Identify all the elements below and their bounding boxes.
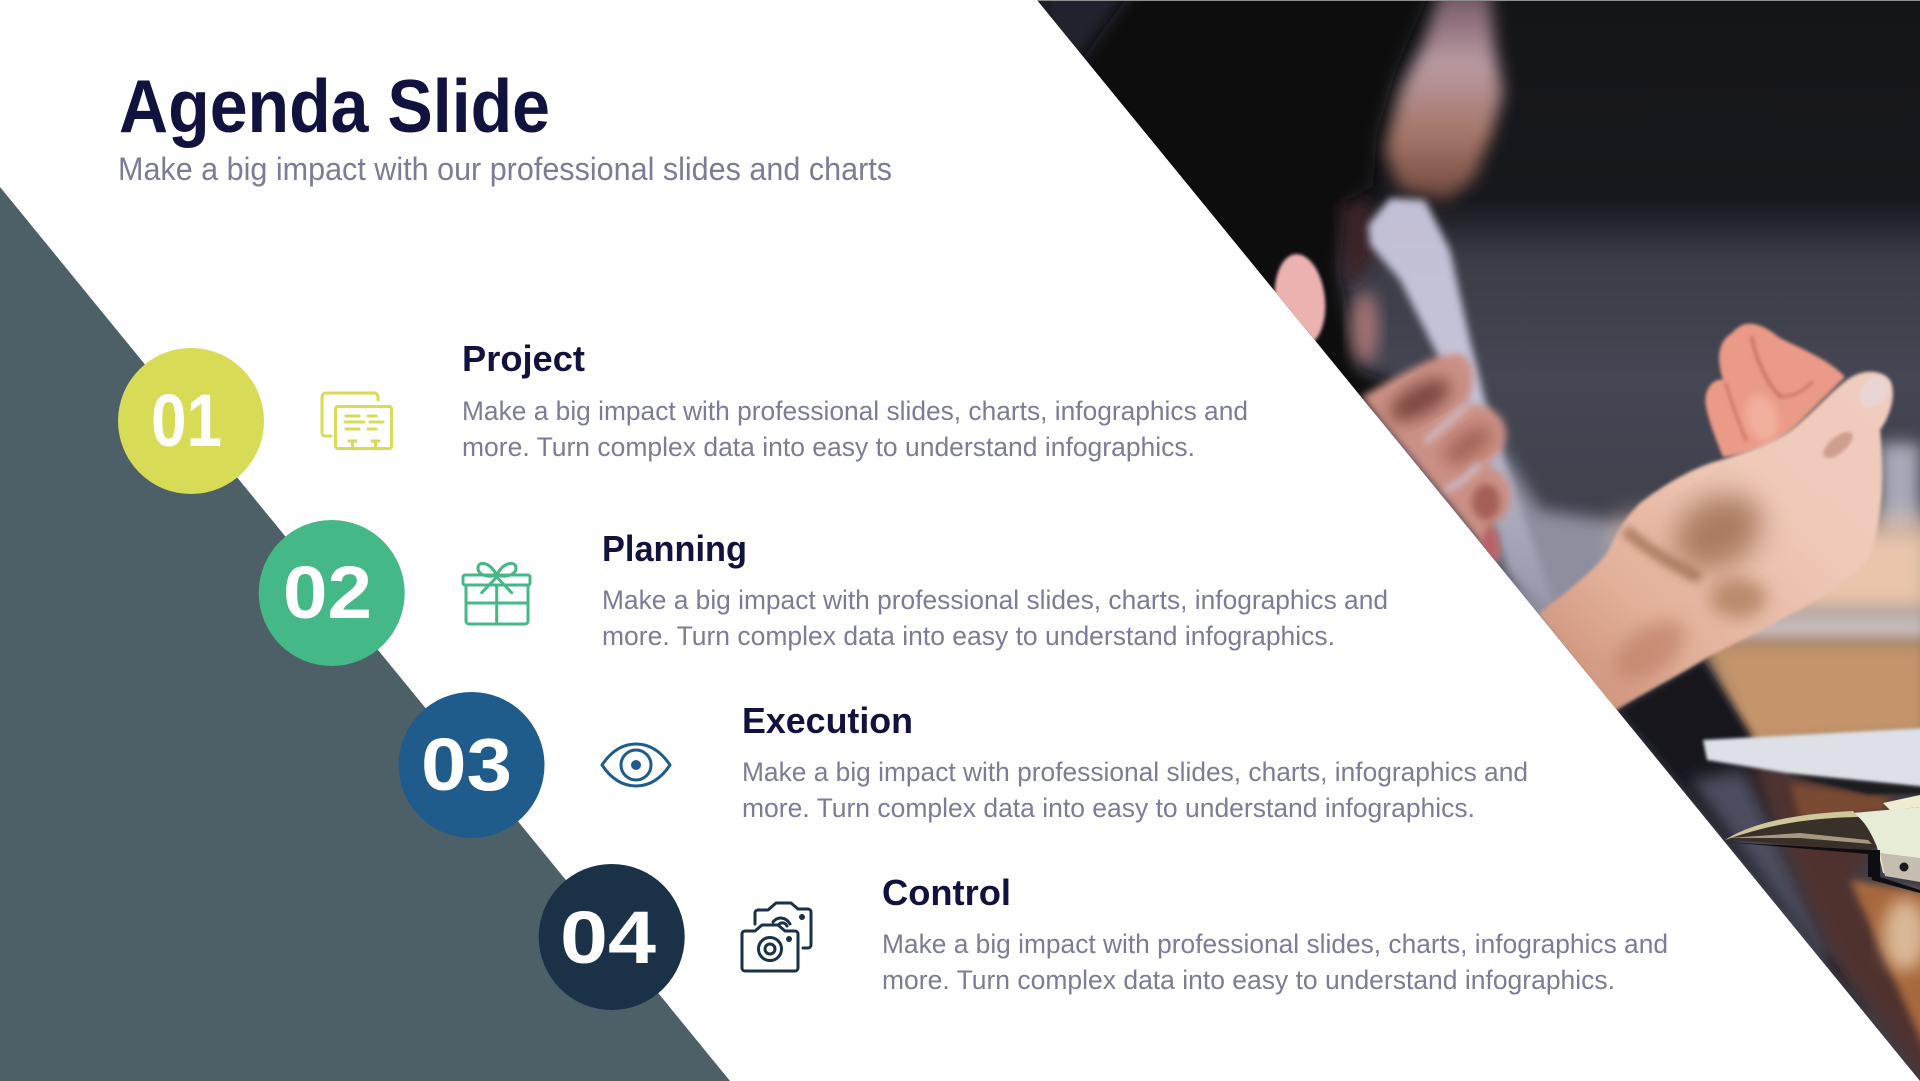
icon: eye: [602, 744, 670, 786]
description: Project: [462, 396, 1248, 462]
number badge 03: 03: [421, 723, 512, 806]
description: Planning: more. Turn complex data into easy to understand infographics.: [602, 621, 1335, 651]
description: Project: Make a big impact with professional slides, charts, infographics and: [462, 396, 1248, 426]
description: Planning: [602, 585, 1388, 651]
description: Execution: [742, 757, 1528, 823]
title: Agenda Slide: [119, 64, 550, 148]
icon: calendar cards: [322, 393, 392, 449]
photo: meeting participants gesturing, clipped to diagonal: [1037, 0, 1920, 1081]
description: Control: Make a big impact with professional slides, charts, infographics and: [882, 929, 1668, 959]
agenda item 01: Project: [118, 338, 1248, 494]
heading: Project: Project: [462, 338, 585, 379]
description: Planning: Make a big impact with professional slides, charts, infographics and: [602, 585, 1388, 615]
number badge 04: [539, 864, 685, 1010]
description: Control: [882, 929, 1668, 995]
number badge 02: [259, 520, 405, 666]
agenda item 02: Planning: [259, 520, 1388, 666]
number badge 01: 01: [151, 379, 222, 462]
description: Project: more. Turn complex data into easy to understand infographics.: [462, 432, 1195, 462]
number badge 03: [398, 692, 544, 838]
number badge 01: [118, 348, 264, 494]
subtitle: Make a big impact with our professional slides and charts: [118, 151, 892, 187]
heading: Planning: Planning: [602, 528, 747, 569]
icon: two cameras: [742, 903, 811, 971]
description: Control: more. Turn complex data into easy to understand infographics.: [882, 965, 1615, 995]
number badge 04: 04: [560, 896, 656, 979]
description: Execution: more. Turn complex data into easy to understand infographics.: [742, 793, 1475, 823]
number badge 02: 02: [283, 551, 372, 634]
icon: gift box: [463, 563, 530, 624]
heading: Execution: Execution: [742, 700, 913, 741]
description: Execution: Make a big impact with professional slides, charts, infographics and: [742, 757, 1528, 787]
heading: Control: Control: [882, 872, 1011, 913]
agenda item 03: Execution: [398, 692, 1528, 838]
left diagonal slate triangle: [0, 187, 730, 1081]
agenda item 04: Control: [539, 864, 1668, 1010]
